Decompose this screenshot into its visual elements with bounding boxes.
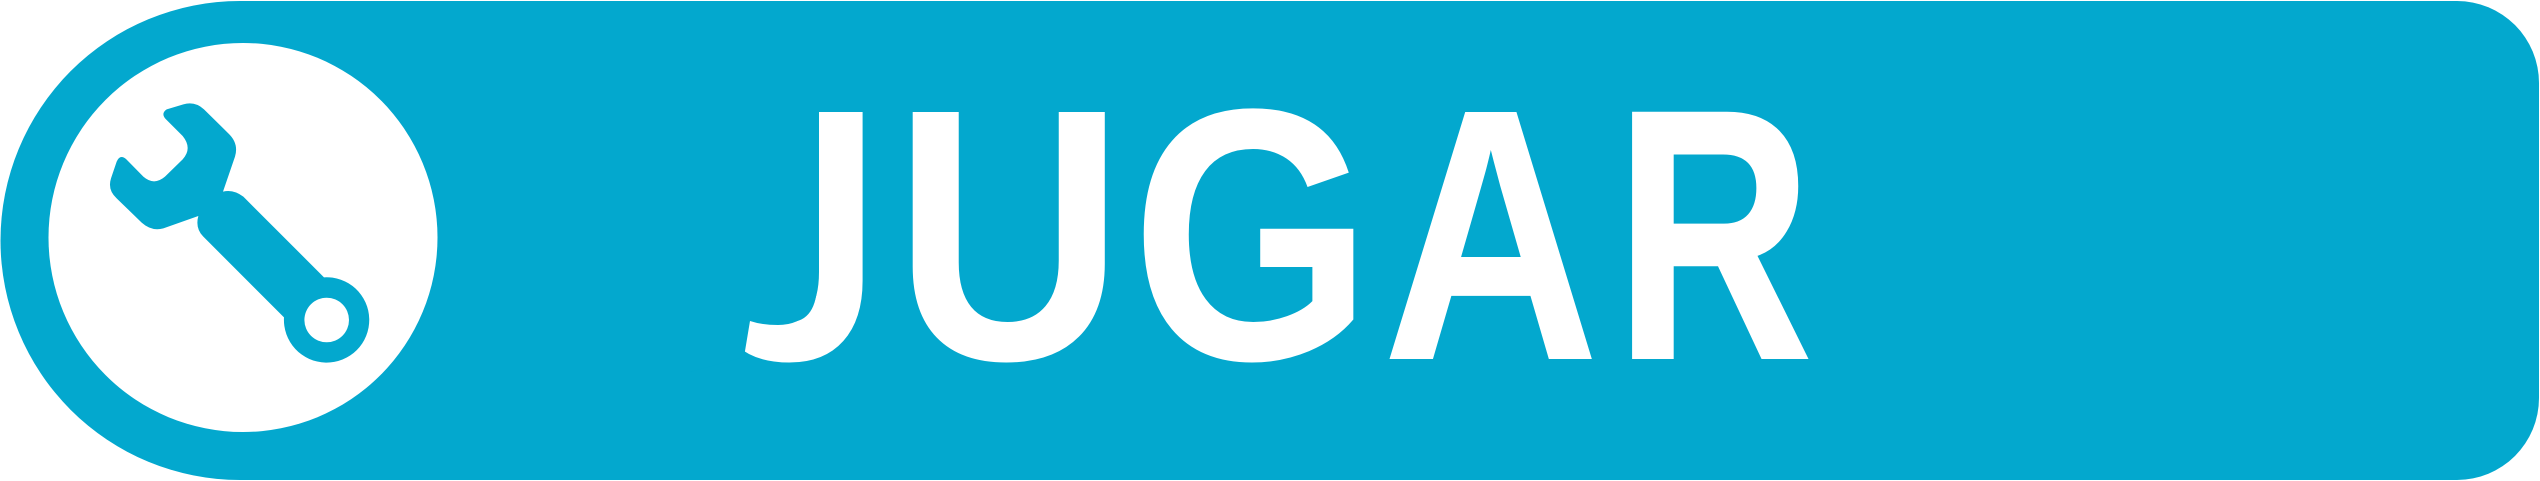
heading: JUGAR: G bbox=[1131, 35, 1373, 436]
heading: JUGAR: J bbox=[708, 35, 884, 436]
heading: JUGAR: A bbox=[1382, 35, 1600, 436]
icon: wrench in white circle bbox=[48, 43, 438, 432]
heading: JUGAR: U bbox=[894, 35, 1124, 436]
heading: JUGAR: R bbox=[1615, 38, 1812, 434]
